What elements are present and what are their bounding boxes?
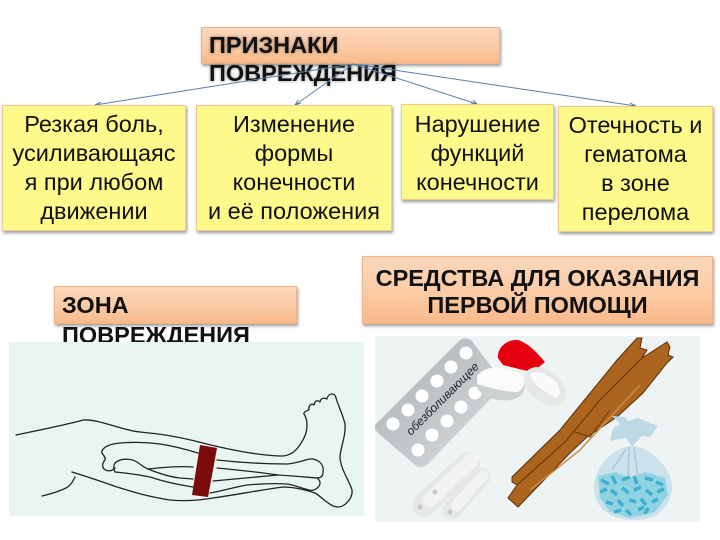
box: sharp pain: Резкая боль, <box>24 111 164 137</box>
heading box: first aid supplies: ПЕРВОЙ ПОМОЩИ <box>427 292 648 318</box>
box: swelling and hematoma: Отечность и <box>569 112 702 138</box>
box: change of shape: конечности <box>233 169 355 195</box>
box: swelling and hematoma: гематома <box>584 141 687 167</box>
heading: injury zone: ЗОНА <box>62 292 129 318</box>
box: sharp pain: движении <box>40 198 148 224</box>
box: change of shape: и её положения <box>208 198 380 224</box>
heading box: first aid supplies <box>362 256 713 324</box>
ice bag <box>594 416 672 520</box>
box: swelling and hematoma: в зоне <box>601 170 670 196</box>
box: swelling and hematoma: перелома <box>582 199 689 225</box>
box: loss of function: конечности <box>416 169 539 195</box>
connector arrows <box>94 64 636 106</box>
box: change of shape: формы <box>255 140 333 166</box>
box: change of shape: Изменение <box>233 111 355 137</box>
heading: signs of injury <box>208 32 398 88</box>
injury band <box>192 445 217 497</box>
box: swelling and hematoma <box>558 106 713 232</box>
blister pack of painkillers: обезболивающее <box>403 359 482 438</box>
blister pack of painkillers <box>375 338 502 467</box>
box: loss of function: функций <box>431 140 524 166</box>
illustration: leg with injury zone <box>9 342 364 516</box>
box: sharp pain: я при любом <box>25 169 163 195</box>
heading: signs of injury: ПРИЗНАКИ <box>209 32 338 58</box>
box: loss of function: Нарушение <box>415 111 540 137</box>
heading: signs of injury: ПОВРЕЖДЕНИЯ <box>209 60 397 86</box>
box: loss of function <box>401 104 554 200</box>
heading: injury zone: ПОВРЕЖДЕНИЯ <box>62 322 250 348</box>
illustration: first aid supplies <box>375 336 700 522</box>
box: sharp pain <box>2 105 186 231</box>
bandage rolls <box>424 460 483 510</box>
heading box: signs of injury <box>201 27 500 64</box>
box: change of shape <box>196 105 392 231</box>
box: sharp pain: усиливающаяс <box>12 140 176 166</box>
pills <box>476 340 566 406</box>
heading box: injury zone <box>54 286 297 324</box>
wooden splints <box>508 338 673 507</box>
heading: injury zone <box>62 292 250 348</box>
heading box: first aid supplies: СРЕДСТВА ДЛЯ ОКАЗАНИЯ <box>376 265 699 291</box>
